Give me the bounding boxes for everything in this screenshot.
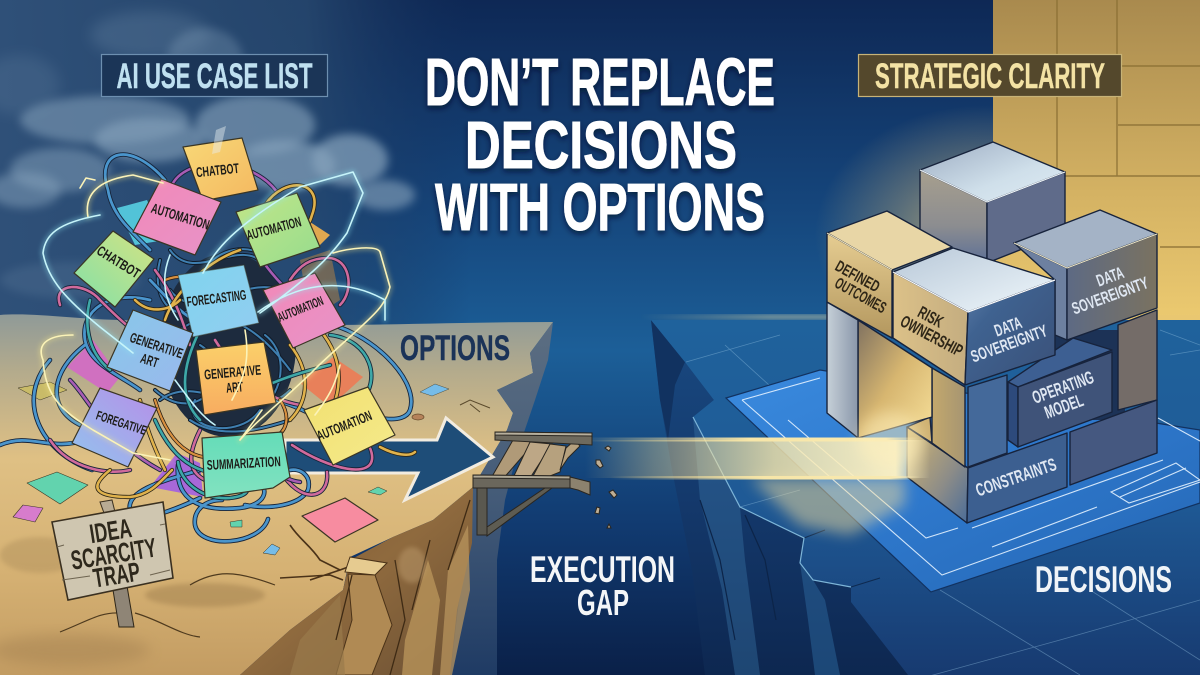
block: risk ownership and data sovereignty: RISK xyxy=(915,303,947,332)
note: automation pink right xyxy=(263,273,345,348)
block: data sovereignty right: DATA xyxy=(1094,263,1127,291)
block: data sovereignty right xyxy=(1014,210,1157,340)
left cliff rock faces xyxy=(240,322,553,675)
horizon glow xyxy=(640,315,1200,320)
tangled cables xyxy=(0,155,415,541)
block: risk ownership and data sovereignty: SOVEREIGNTY xyxy=(968,321,1050,366)
note: automation pink: AUTOMATION xyxy=(149,200,211,233)
sign post xyxy=(100,500,134,627)
note: generative art blue xyxy=(107,310,193,391)
title: DECISIONS xyxy=(465,108,737,183)
title: WITH OPTIONS xyxy=(435,170,765,245)
note: foregative: FOREGATIVE xyxy=(94,408,149,438)
note: automation pink right: AUTOMATION xyxy=(275,293,325,325)
note: generative art orange xyxy=(196,342,276,415)
blueprint sheet xyxy=(726,370,1200,592)
label: execution gap: EXECUTION xyxy=(530,549,675,590)
block: operating model: OPERATING xyxy=(1029,367,1096,408)
note: chatbot top: CHATBOT xyxy=(195,160,240,180)
note: automation green: AUTOMATION xyxy=(245,213,303,243)
label: AI use case list xyxy=(102,54,328,96)
block: constraints base xyxy=(907,400,1157,523)
broken bridge xyxy=(473,432,617,536)
sign: idea scarcity trap xyxy=(52,500,173,627)
note: automation green xyxy=(236,193,320,267)
block: operating model: MODEL xyxy=(1042,390,1086,423)
right plateau xyxy=(651,320,1200,675)
note: forecasting xyxy=(178,265,259,337)
note: automation yellow xyxy=(304,387,395,465)
electric arcs xyxy=(41,172,390,460)
block: defined outcomes: OUTCOMES xyxy=(832,275,889,317)
block: risk ownership and data sovereignty: OWNERSHIP xyxy=(897,312,966,360)
title xyxy=(425,45,775,245)
note: foregative xyxy=(72,388,157,467)
block: middle column xyxy=(932,368,1007,467)
left sandy plateau xyxy=(0,314,553,675)
label: strategic clarity xyxy=(858,54,1122,96)
arrow xyxy=(285,418,493,500)
label: options: OPTIONS xyxy=(400,329,510,368)
note: summarization xyxy=(202,432,290,498)
note: automation pink xyxy=(133,179,221,255)
note: chatbot lime: CHATBOT xyxy=(94,242,144,281)
strategic block stack xyxy=(827,142,1157,523)
note: forecasting: FORECASTING xyxy=(186,286,247,310)
sign board: TRAP xyxy=(91,557,142,594)
block: gap shadow behind stack xyxy=(1040,330,1125,420)
title: DON’T REPLACE xyxy=(425,45,775,120)
block: operating model xyxy=(1008,338,1112,447)
block: right pillar xyxy=(1118,310,1157,410)
note: generative art blue: ART xyxy=(139,350,161,371)
label: AI use case list: AI USE CASE LIST xyxy=(116,57,312,96)
note: automation yellow: AUTOMATION xyxy=(314,407,374,444)
block: risk ownership and data sovereignty xyxy=(893,248,1055,385)
note: generative art orange: ART xyxy=(225,378,244,396)
golden wall xyxy=(815,0,1200,365)
note: generative art blue: GENERATIVE xyxy=(128,329,185,361)
sign board: SCARCITY xyxy=(69,533,158,576)
block: top cube xyxy=(920,142,1065,263)
block: defined outcomes: DEFINED xyxy=(832,258,882,296)
block: defined outcomes xyxy=(827,211,952,338)
storm clouds xyxy=(0,11,415,298)
sticky notes xyxy=(72,126,395,498)
label: execution gap: GAP xyxy=(577,582,629,623)
block: data sovereignty right: SOVEREIGNTY xyxy=(1069,273,1151,318)
note: chatbot top xyxy=(183,126,258,201)
note: chatbot lime xyxy=(74,231,154,307)
light beam across gap xyxy=(580,412,930,480)
note: generative art orange: GENERATIVE xyxy=(203,362,262,382)
sign board xyxy=(52,502,173,600)
sign board: IDEA xyxy=(88,513,134,549)
label: execution gap xyxy=(530,549,675,623)
block: left pillar xyxy=(827,302,932,438)
scattered sticky notes on ground xyxy=(13,382,449,555)
block: risk ownership and data sovereignty: DATA xyxy=(992,313,1025,341)
block: constraints base: CONSTRAINTS xyxy=(973,454,1059,500)
note: summarization: SUMMARIZATION xyxy=(206,453,281,473)
